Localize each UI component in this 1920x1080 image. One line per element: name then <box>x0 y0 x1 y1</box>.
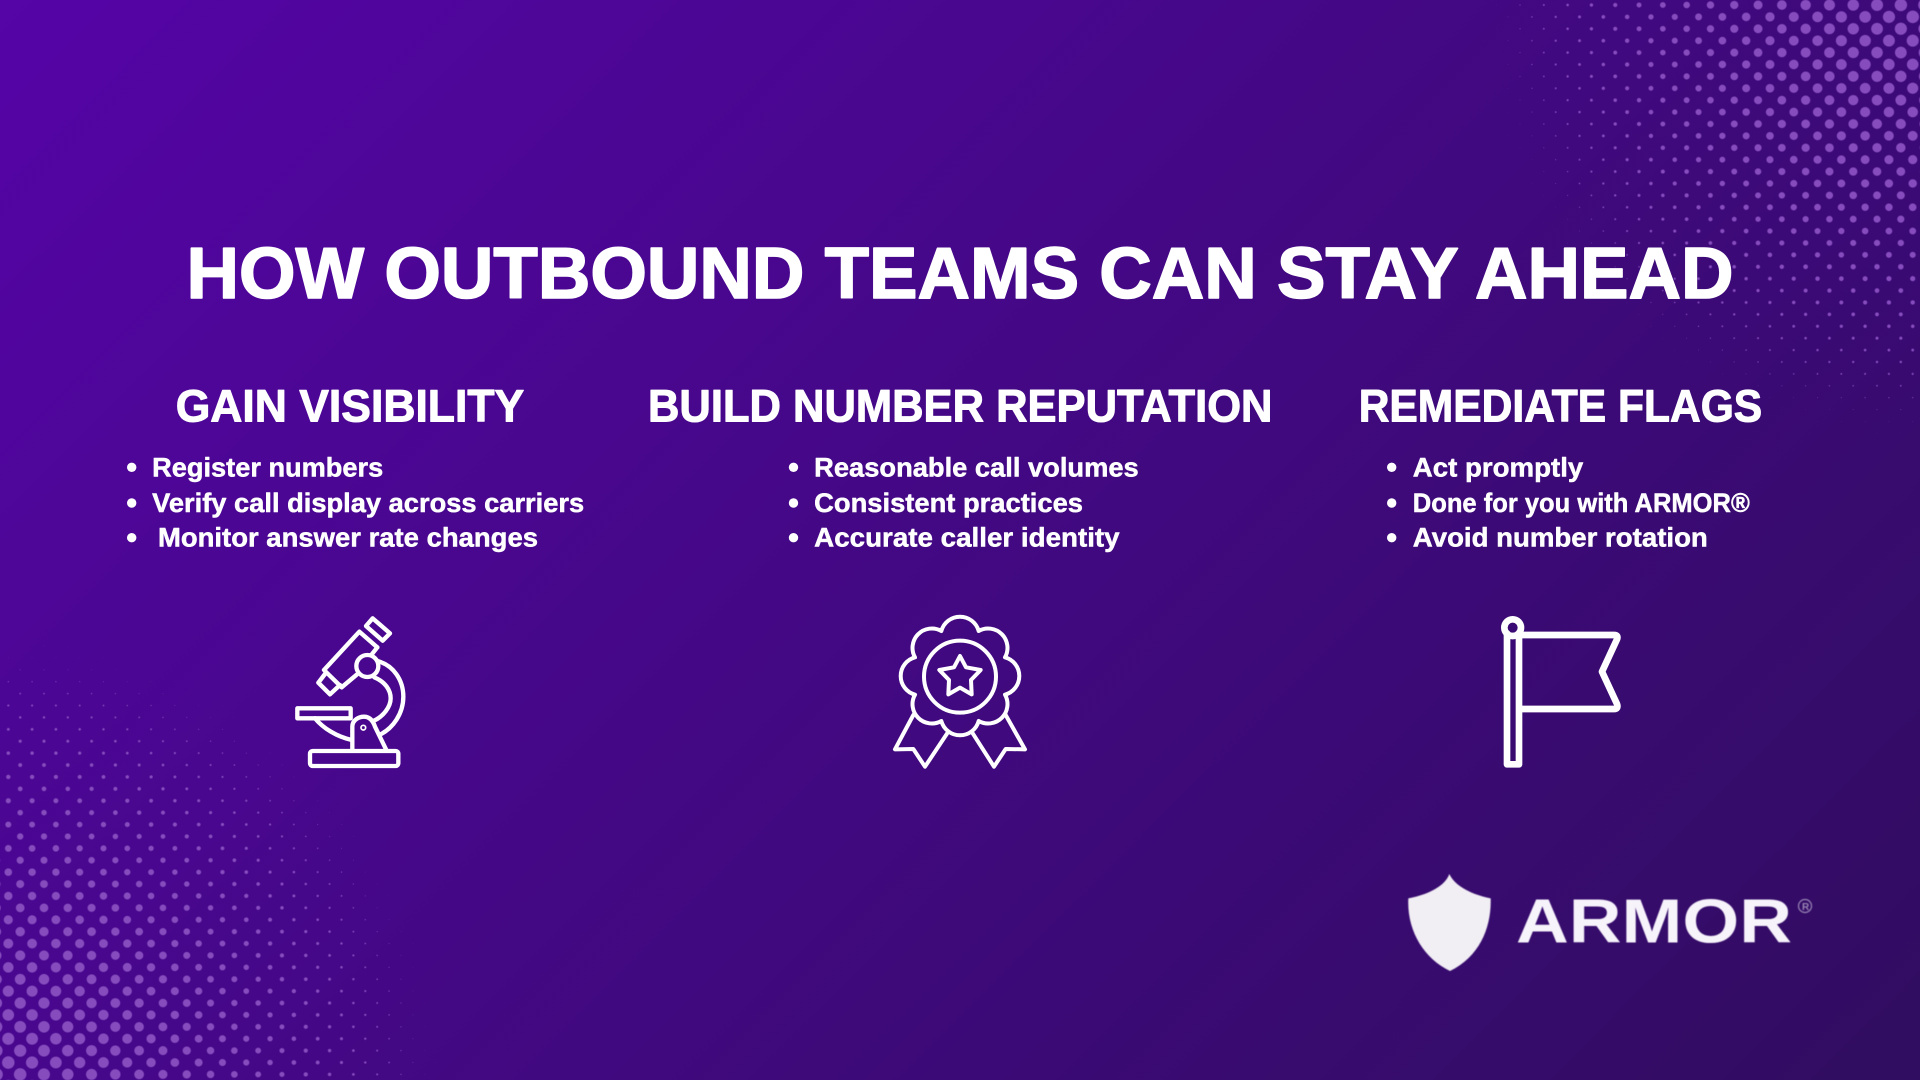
icon: award ribbon <box>895 617 1025 767</box>
bullet list: gain visibility <box>127 453 584 553</box>
title: HOW OUTBOUND TEAMS CAN STAY AHEAD <box>186 234 1734 314</box>
bullet list: build number reputation: Consistent practices <box>814 488 1083 518</box>
halftone dots: top right <box>1470 0 1920 440</box>
heading: gain visibility: GAIN VISIBILITY <box>176 381 524 432</box>
bullet list: remediate flags: Act promptly <box>1413 453 1584 483</box>
bullet list: build number reputation: Accurate caller identity <box>814 523 1120 553</box>
bullet list: gain visibility: Monitor answer rate changes <box>158 523 538 553</box>
icon: flag <box>1504 619 1617 764</box>
halftone dots: bottom left <box>0 640 450 1080</box>
heading: build number reputation: BUILD NUMBER REPUTATION <box>648 381 1272 432</box>
bullet list: remediate flags <box>1387 453 1750 553</box>
panel: build number reputation <box>648 381 1272 767</box>
bullet list: build number reputation <box>789 453 1139 553</box>
bullet list: gain visibility: Register numbers <box>152 453 383 483</box>
icon: shield <box>1408 874 1491 971</box>
logo wordmark: ARMOR <box>1516 888 1792 956</box>
registered mark <box>1798 900 1812 913</box>
panel: gain visibility <box>127 381 584 766</box>
registered mark: R <box>1802 902 1810 913</box>
heading: remediate flags: REMEDIATE FLAGS <box>1359 381 1762 432</box>
logo: armor <box>1408 874 1812 971</box>
bullet list: remediate flags: Done for you with ARMOR® <box>1413 488 1750 518</box>
bullet list: build number reputation: Reasonable call volumes <box>814 453 1139 483</box>
bullet list: remediate flags: Avoid number rotation <box>1413 523 1708 553</box>
bullet list: gain visibility: Verify call display across carriers <box>152 488 584 518</box>
icon: microscope <box>297 618 403 766</box>
panel: remediate flags <box>1359 381 1762 764</box>
